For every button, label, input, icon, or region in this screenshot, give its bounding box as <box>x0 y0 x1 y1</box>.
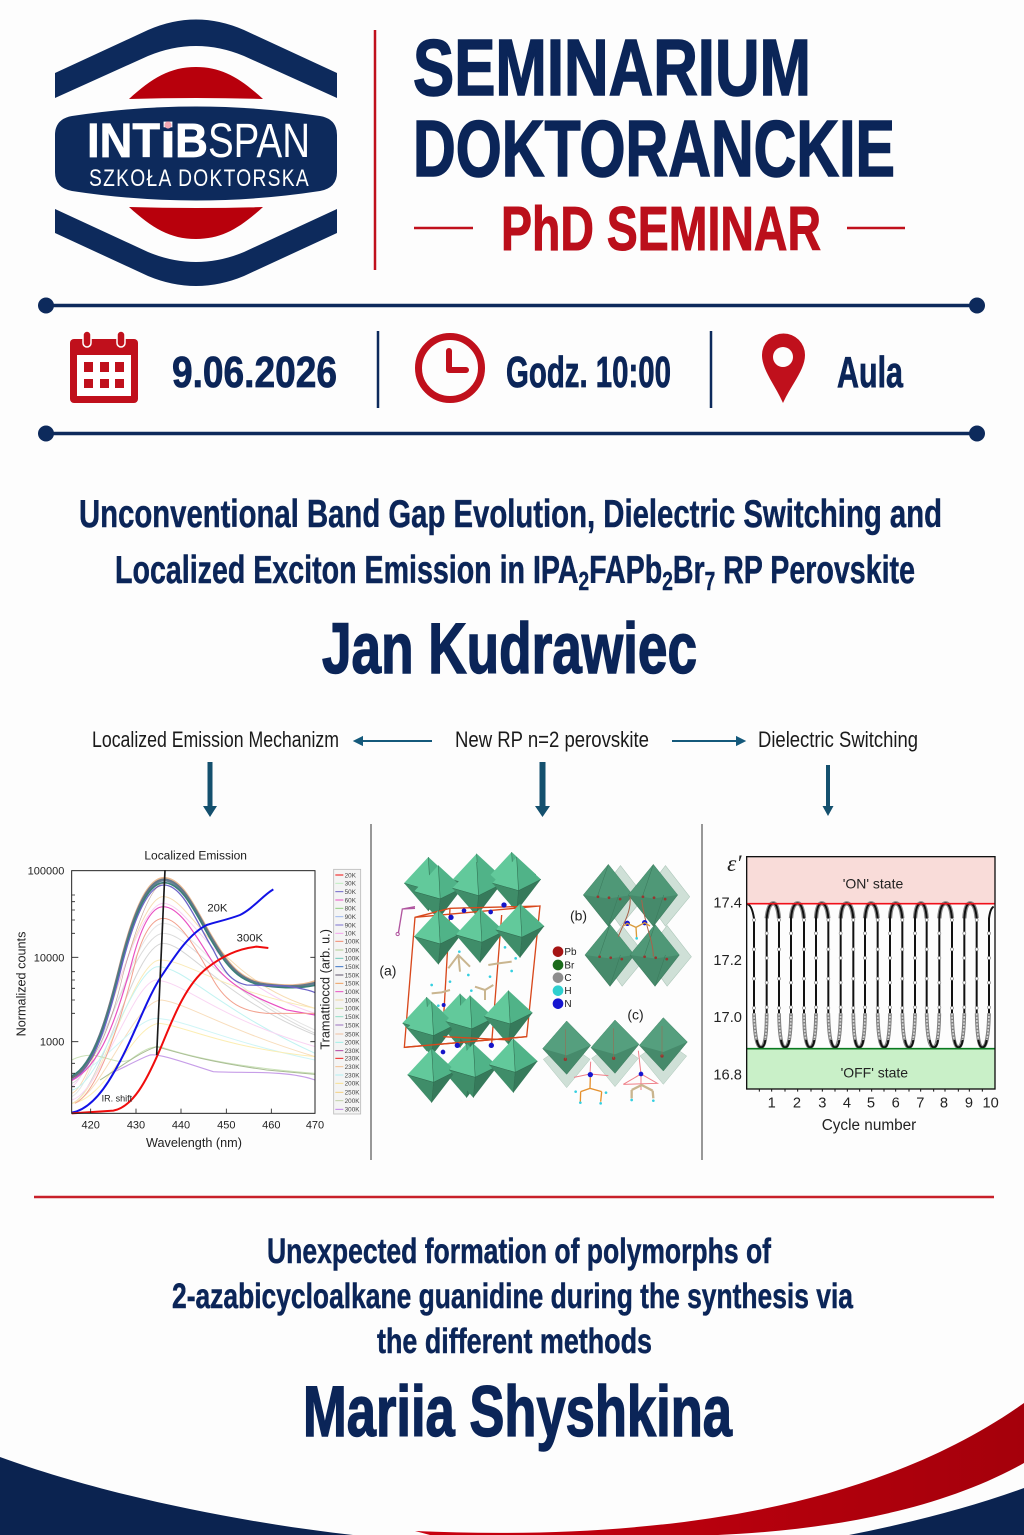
arrow: down left <box>203 762 217 817</box>
talk 1 title: FAPb <box>589 549 662 592</box>
title: Seminarium Doktoranckie <box>413 23 895 193</box>
band labels: 'OFF' state <box>841 1065 908 1081</box>
legend: 10K <box>345 931 357 938</box>
chart: dielectric switching <box>713 851 999 1134</box>
legend: 200K <box>345 1040 360 1047</box>
axis labels: 17.2 <box>713 953 742 969</box>
plot frame <box>72 871 315 1113</box>
talk 2 title <box>172 1232 853 1361</box>
structure (c) <box>543 1018 687 1105</box>
atom legend: Pb <box>564 947 577 958</box>
bottom wave decoration <box>0 1403 1024 1535</box>
legend: 100K <box>345 939 360 946</box>
axis labels: 10 <box>983 1095 999 1111</box>
axis labels: 4 <box>843 1095 851 1111</box>
axis labels <box>15 866 332 1150</box>
blue curve 20K <box>72 889 273 1113</box>
icon: map pin <box>762 334 805 403</box>
band labels <box>841 876 908 1081</box>
axis labels: 420 <box>82 1120 100 1132</box>
logo: INTiBSPAN Szkoła Doktorska: i <box>160 115 176 168</box>
legend: 100K <box>345 956 360 963</box>
flow labels and arrows <box>92 727 918 817</box>
legend: 350K <box>345 1031 360 1038</box>
axis labels: Normalized counts <box>15 932 29 1036</box>
legend: 200K <box>345 1098 360 1105</box>
axis labels: 470 <box>306 1120 324 1132</box>
axis labels: 440 <box>172 1120 190 1132</box>
talk 2 title: Unexpected formation of polymorphs of <box>267 1232 771 1271</box>
legend: 100K <box>345 1006 360 1013</box>
talk 1 title: 2 <box>662 566 673 596</box>
date: 9.06.2026 <box>172 348 337 397</box>
OFF band <box>747 1049 995 1089</box>
axis labels: 5 <box>867 1095 875 1111</box>
ON threshold line <box>747 901 995 906</box>
atom legend <box>553 946 577 1010</box>
legend: 20K <box>345 872 357 879</box>
structure (a) <box>396 852 544 1103</box>
arrow: down right <box>822 765 834 816</box>
label: new perovskite: New RP n=2 perovskite <box>455 727 649 752</box>
figure: perovskite crystal structure <box>379 852 691 1105</box>
shift line <box>157 870 165 1055</box>
ON band <box>747 857 995 903</box>
axis labels: 8 <box>940 1095 948 1111</box>
logo: INTiBSPAN Szkoła Doktorska: SPAN <box>208 115 310 168</box>
OFF threshold line <box>747 1046 995 1051</box>
structure (b) <box>583 864 691 986</box>
axis labels: 2 <box>793 1095 801 1111</box>
plot frame <box>747 857 995 1089</box>
legend: 230K <box>345 1048 360 1055</box>
axis labels: ε′ <box>727 851 742 877</box>
talk 1 title: RP Perovskite <box>715 549 915 592</box>
main bundle <box>72 878 315 1103</box>
talk 1 title: 7 <box>705 566 715 596</box>
axis labels: 16.8 <box>713 1067 742 1083</box>
atom legend: C <box>564 973 572 984</box>
label (b): (b) <box>570 908 587 924</box>
arrow: to left <box>355 738 432 744</box>
place: Aula <box>837 348 903 397</box>
axis labels: 1000 <box>40 1037 64 1049</box>
axis labels <box>713 851 999 1134</box>
axis labels: 6 <box>892 1095 900 1111</box>
red curve 300K <box>72 947 268 1113</box>
legend: 50K <box>345 889 357 896</box>
legend: 90K <box>345 914 357 921</box>
talk 2 title: the different methods <box>377 1322 652 1361</box>
time: Godz. 10:00 <box>506 348 671 397</box>
speaker 2: Mariia Shyshkina <box>303 1373 732 1452</box>
axis labels: 430 <box>127 1120 145 1132</box>
legend <box>334 869 361 1114</box>
cycling curve <box>747 903 994 1047</box>
legend: 150K <box>345 972 360 979</box>
axis labels: 17.0 <box>713 1010 742 1026</box>
arrow: down centre <box>535 762 550 817</box>
label (a): (a) <box>379 963 396 979</box>
talk 1 title <box>79 493 942 596</box>
legend: 90K <box>345 922 357 929</box>
label: dielectric switching: Dielectric Switching <box>758 727 918 752</box>
legend: 100K <box>345 989 360 996</box>
legend: 150K <box>345 1014 360 1021</box>
axis labels: IR. shift <box>102 1094 133 1104</box>
legend: 150K <box>345 981 360 988</box>
legend: 150K <box>345 964 360 971</box>
pale temperature curves <box>72 897 315 1103</box>
axis labels: 100000 <box>28 866 64 878</box>
axis labels: Wavelength (nm) <box>146 1136 242 1150</box>
logo: INTiBSPAN Szkoła Doktorska <box>55 20 337 286</box>
icon: calendar <box>70 331 138 403</box>
chart: localized emission spectra <box>15 848 361 1150</box>
talk 1 title: Localized Exciton Emission in IPA <box>115 549 747 592</box>
atom legend: N <box>564 999 572 1010</box>
title: Seminarium Doktoranckie: SEMINARIUM <box>413 23 811 112</box>
axis labels: 10000 <box>34 952 64 964</box>
header divider <box>374 30 376 270</box>
logo: INTiBSPAN Szkoła Doktorska: INT <box>87 115 160 168</box>
legend: 300K <box>345 1107 360 1114</box>
legend: 80K <box>345 906 357 913</box>
axis labels: Tramattioccd (arb. u.) <box>318 929 332 1050</box>
axis labels: 20K <box>207 902 228 914</box>
legend: 100K <box>345 997 360 1004</box>
axis labels: 1 <box>768 1095 776 1111</box>
talk 1 title: Br <box>673 549 705 592</box>
logo: INTiBSPAN Szkoła Doktorska: B <box>175 115 208 168</box>
axis labels: Cycle number <box>822 1117 916 1134</box>
subtitle: PhD Seminar: PhD SEMINAR <box>501 195 821 264</box>
info bar: date, time, place <box>38 298 985 442</box>
atom legend: H <box>564 986 572 997</box>
legend: 230K <box>345 1072 360 1079</box>
legend: 100K <box>345 947 360 954</box>
legend: 30K <box>345 881 357 888</box>
logo: INTiBSPAN Szkoła Doktorska: SZKOŁA DOKTORSKA <box>89 165 310 192</box>
legend: 250K <box>345 1090 360 1097</box>
speaker 1: Jan Kudrawiec <box>322 610 697 689</box>
arrow: to right <box>672 738 744 744</box>
label: localized emission: Localized Emission Mechanizm <box>92 727 339 752</box>
axis labels: 450 <box>217 1120 235 1132</box>
atom legend: Br <box>564 960 575 971</box>
legend: 60K <box>345 897 357 904</box>
axis labels: 300K <box>237 933 264 945</box>
icon: clock <box>418 336 482 400</box>
legend: 230K <box>345 1056 360 1063</box>
axis labels: 460 <box>262 1120 280 1132</box>
chart: localized emission spectra: Localized Emission <box>144 848 247 862</box>
legend: 230K <box>345 1064 360 1071</box>
talk 1 title: 2 <box>579 566 589 596</box>
axis labels: 17.4 <box>713 895 742 911</box>
legend: 150K <box>345 1022 360 1029</box>
label (c): (c) <box>627 1006 644 1022</box>
band labels: 'ON' state <box>843 876 903 892</box>
legend: 200K <box>345 1081 360 1088</box>
axis labels: 7 <box>916 1095 924 1111</box>
axis labels: 3 <box>818 1095 826 1111</box>
axis labels: 9 <box>965 1095 973 1111</box>
